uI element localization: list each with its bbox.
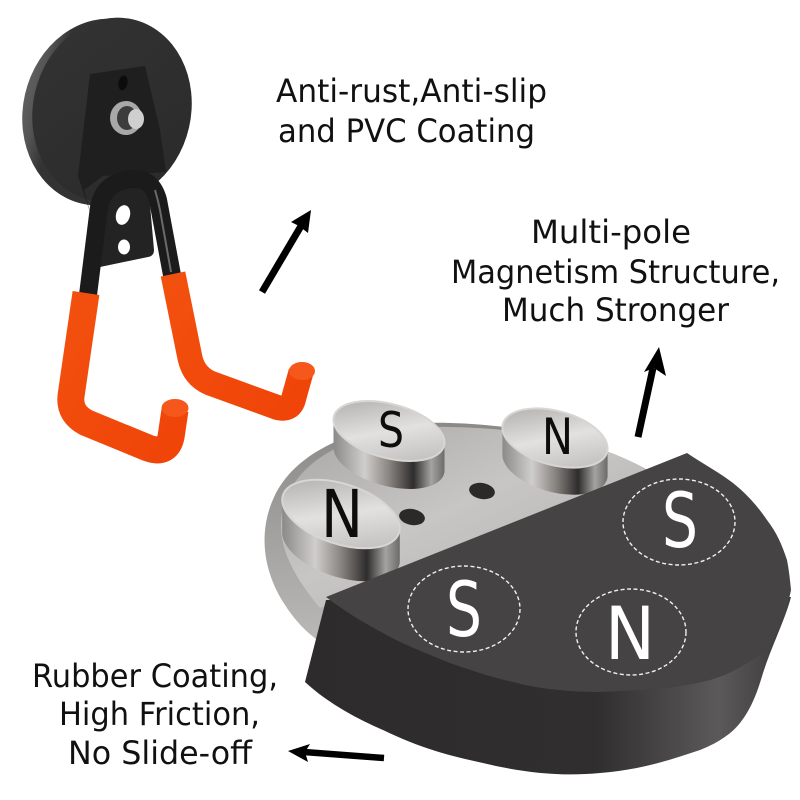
black U tube [88,179,172,295]
magnet S: S [378,402,404,459]
magnet N front [274,467,408,581]
magnet N: N [542,408,573,466]
callout: rubber coating: No Slide-off [68,734,253,772]
pole circle N: N [605,592,655,677]
callout: Anti-rust coating: Anti-rust,Anti-slip [276,72,547,110]
callout: rubber coating [32,657,278,772]
callout: multi-pole magnetism [451,213,780,329]
lower bracket plate with holes [100,182,154,267]
orange coated arm: left [71,293,188,450]
pole circle S right: S [662,476,698,565]
pole circle S right [623,476,735,565]
pole circle S left [408,565,520,654]
mounting holes [398,481,496,527]
magnet N front: N [321,476,363,553]
callout: Anti-rust coating [276,72,547,150]
callout: Anti-rust coating: and PVC Coating [278,112,535,150]
arrow: toward magnets [638,347,666,437]
callout: rubber coating: Rubber Coating, [32,657,278,695]
arrow: toward hook coating [262,210,311,292]
upper bracket plate [78,66,166,212]
callout: multi-pole magnetism: Magnetism Structure, [451,253,780,291]
pole circle S left: S [446,565,482,654]
product: wall hook magnet [4,2,315,450]
callout: multi-pole magnetism: Much Stronger [502,291,730,329]
callout: multi-pole magnetism: Multi-pole [531,213,691,251]
magnet S [327,390,451,489]
pole circle N [576,589,686,677]
steel base disc [265,423,690,648]
orange coated arm: right [173,274,315,408]
product: steel base with magnets [265,390,690,648]
rubber top face [326,453,791,692]
magnet disc [4,2,210,222]
arrow: toward rubber text [288,744,384,762]
rubber side wall [305,597,791,774]
magnet N [496,398,614,495]
callout: rubber coating: High Friction, [59,695,260,733]
nut and bolt [110,101,144,135]
product: rubber coated half disc [305,453,791,774]
